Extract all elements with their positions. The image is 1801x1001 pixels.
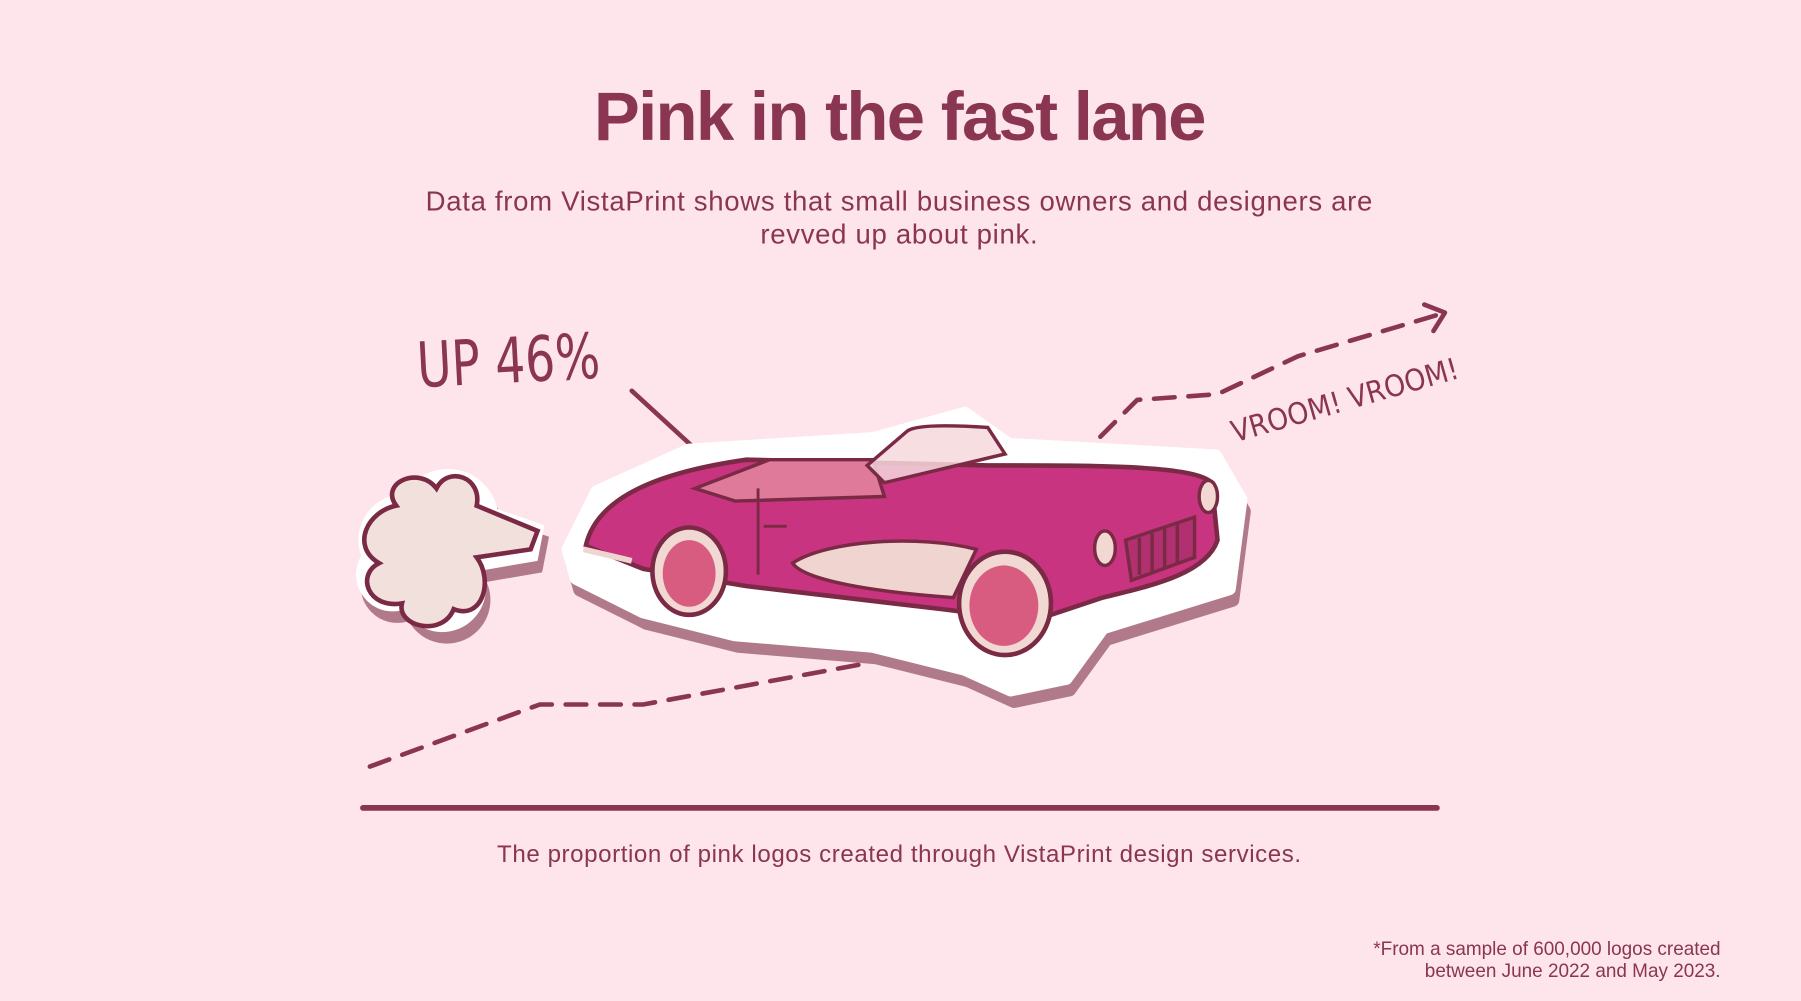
axis baseline	[363, 805, 1437, 810]
sticker shadow	[572, 425, 1244, 701]
footnote: *From a sample of 600,000 logos created	[1373, 939, 1721, 960]
rear bumper	[583, 549, 632, 561]
callout: UP 46%: UP 46%	[415, 319, 602, 402]
subtitle	[426, 185, 1373, 250]
car body	[586, 460, 1218, 621]
sticker white	[569, 414, 1240, 690]
arrow head	[1424, 305, 1445, 331]
grille	[1126, 517, 1195, 580]
caption: The proportion of pink logos created through VistaPrint design services.	[497, 841, 1302, 868]
subtitle: Data from VistaPrint shows that small business owners and designers are	[426, 185, 1373, 216]
door line	[758, 488, 787, 575]
callout line	[632, 391, 701, 454]
footnote: between June 2022 and May 2023.	[1425, 961, 1721, 982]
headlights	[1095, 531, 1115, 565]
windshield	[867, 426, 1005, 483]
cockpit	[695, 460, 884, 501]
side cove	[793, 541, 976, 598]
front wheel	[959, 552, 1051, 655]
car sticker	[569, 414, 1244, 701]
footnote	[1373, 939, 1721, 982]
trend line dashed	[370, 314, 1441, 767]
icon: exhaust cloud	[356, 469, 549, 644]
title: Pink in the fast lane	[594, 78, 1205, 155]
vroom text: VROOM! VROOM!	[1227, 352, 1463, 450]
rear wheel	[652, 528, 726, 615]
subtitle: revved up about pink.	[760, 219, 1038, 250]
